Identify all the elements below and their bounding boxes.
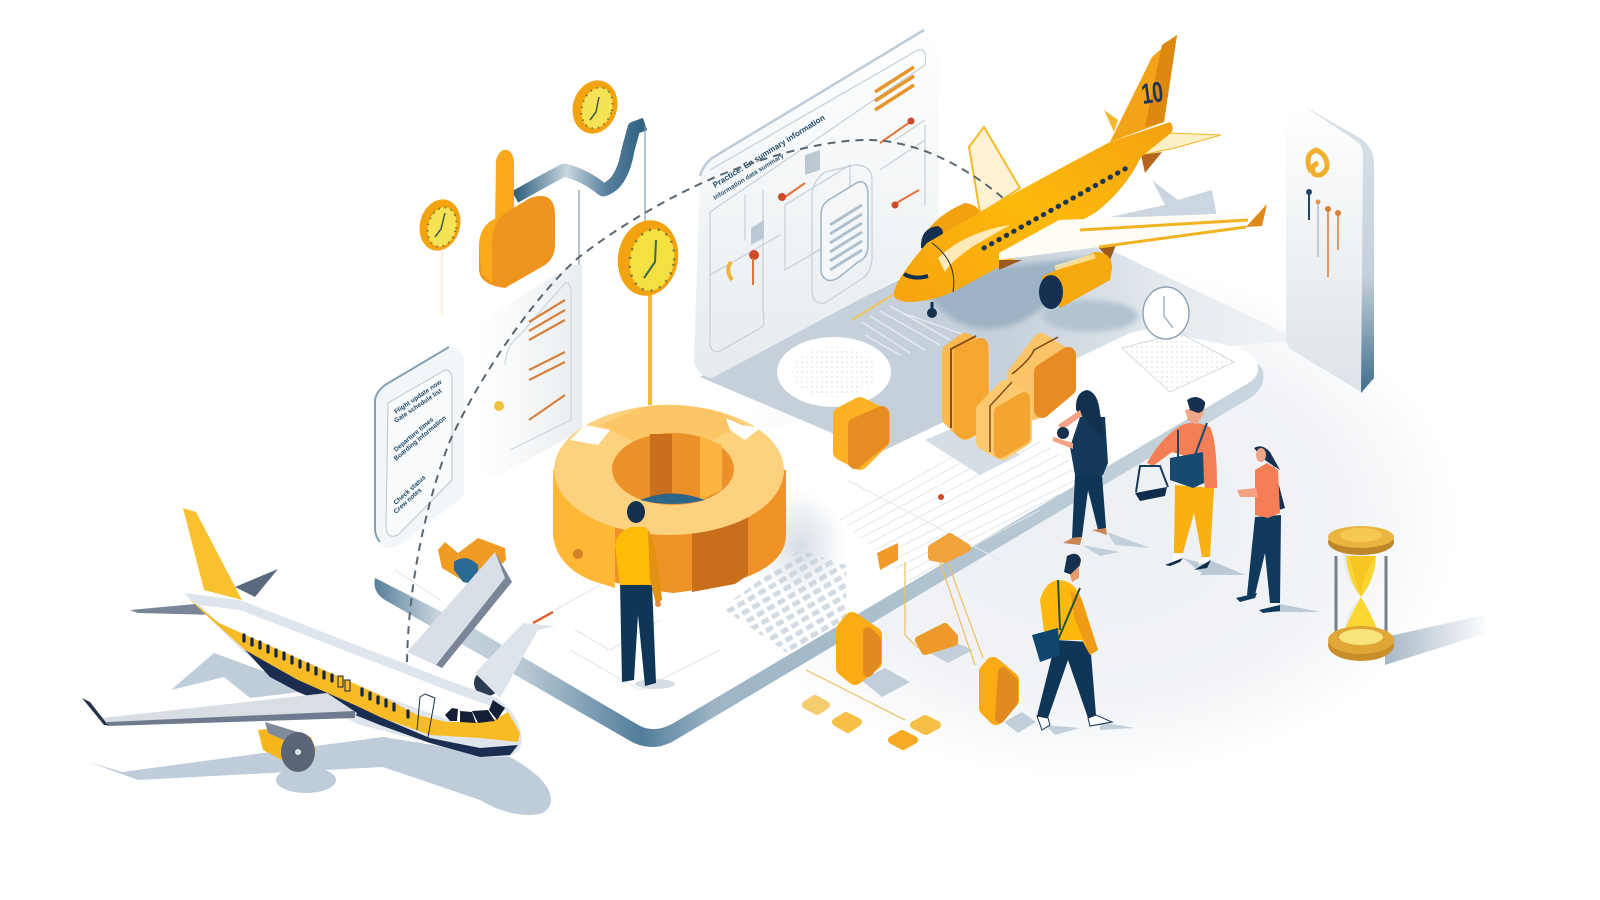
red sliders bbox=[749, 118, 919, 285]
spiral icon bbox=[1308, 150, 1327, 175]
red marker bbox=[938, 494, 944, 500]
runway ruling under nose bbox=[862, 306, 965, 355]
far engine bbox=[474, 670, 500, 696]
shadow bbox=[1183, 558, 1245, 575]
cords bbox=[806, 562, 983, 720]
tail mark: 10 bbox=[1140, 77, 1165, 111]
body highlight bbox=[938, 225, 1010, 272]
icon: clock top bbox=[566, 75, 624, 139]
person: coral vest standing bbox=[1236, 446, 1320, 613]
phone side bbox=[1302, 105, 1374, 393]
case shadow tile bbox=[925, 425, 1020, 475]
shadow: lower plane bbox=[89, 653, 551, 815]
wide case bbox=[1012, 337, 1068, 412]
tag bbox=[877, 543, 898, 570]
taxi line bbox=[852, 294, 894, 320]
note text: Boarding information bbox=[393, 415, 448, 463]
shoulder bag bbox=[1032, 628, 1060, 662]
dotted pad bbox=[792, 347, 876, 397]
tail bbox=[1110, 35, 1177, 142]
small yellow dot bbox=[494, 401, 504, 411]
engine bbox=[258, 728, 316, 770]
mid-cabin doors bbox=[338, 676, 350, 691]
case one bbox=[844, 620, 876, 677]
windows bbox=[984, 165, 1132, 248]
platform edge bbox=[374, 362, 1264, 747]
far fin bbox=[475, 623, 555, 698]
grey squares bbox=[751, 150, 820, 245]
engine shadow bbox=[1042, 300, 1138, 332]
donut structure bbox=[553, 405, 786, 593]
icon: hourglass bbox=[1328, 526, 1490, 665]
yellow stripe bbox=[188, 598, 520, 742]
icon: hanging orange tag bbox=[479, 150, 555, 288]
white band bbox=[200, 605, 520, 735]
doc icon in panel bbox=[812, 165, 872, 303]
dark belly bbox=[245, 650, 518, 757]
shadow bbox=[1045, 722, 1135, 735]
bag in hand bbox=[1136, 466, 1168, 492]
note text: Check status bbox=[393, 474, 428, 506]
stabiliser bbox=[130, 602, 218, 615]
panel: left text note bbox=[375, 347, 464, 548]
windows bbox=[244, 635, 408, 717]
far wing bbox=[969, 127, 1020, 213]
icon: ribbon connector bbox=[515, 124, 645, 265]
floor shadow bbox=[710, 262, 1460, 778]
donut notches bbox=[570, 418, 760, 445]
platform grey backdrop bbox=[700, 245, 1300, 457]
note text bbox=[393, 378, 448, 515]
donut shadow on platform bbox=[755, 490, 845, 600]
plane: white and yellow lower left bbox=[82, 508, 555, 772]
donut hole bbox=[612, 433, 734, 505]
small fin bbox=[1104, 110, 1118, 132]
tall case bbox=[950, 336, 981, 432]
pins bbox=[1308, 190, 1310, 220]
tail ground shadow bbox=[1110, 180, 1217, 217]
platform outline details bbox=[395, 570, 720, 690]
note text: Departure times bbox=[393, 416, 435, 454]
cockpit bbox=[445, 700, 505, 723]
hole floor bbox=[640, 494, 705, 504]
person: yellow shirt bbox=[573, 501, 675, 689]
note text: Gate schedule list bbox=[393, 387, 444, 425]
donut body bbox=[553, 470, 786, 593]
white circle pad bbox=[777, 337, 891, 407]
case two bbox=[987, 665, 1013, 718]
yellow ring icon bbox=[728, 262, 732, 280]
tail fin bbox=[183, 508, 242, 600]
stabiliser bbox=[1141, 133, 1221, 155]
near wing bbox=[999, 204, 1267, 260]
door bbox=[417, 694, 435, 737]
near engine bbox=[1041, 252, 1112, 308]
bags near plane bbox=[438, 538, 506, 585]
person: walking with bag bbox=[1032, 554, 1135, 735]
icon: clock left bbox=[414, 195, 466, 315]
panel text: Practice: En summary information bbox=[711, 113, 827, 190]
gear bbox=[930, 302, 934, 312]
floor shadows bbox=[861, 640, 1036, 733]
panel outlines bbox=[710, 50, 926, 352]
shadow bbox=[1275, 604, 1320, 612]
suitcases on platform bbox=[841, 336, 1068, 475]
ruled sheet bbox=[840, 425, 1080, 580]
luggage on floor bbox=[806, 537, 1036, 746]
person: coral top with bags bbox=[1135, 397, 1245, 575]
panel: large dashboard bbox=[694, 30, 939, 378]
note text: Crew notes bbox=[393, 487, 424, 515]
platform top bbox=[378, 329, 1258, 729]
shadows bbox=[1082, 532, 1150, 556]
hourglass shadow bbox=[1385, 615, 1490, 665]
person shadow bbox=[635, 679, 675, 689]
panel: left schedule bbox=[480, 265, 582, 478]
rear belly shade bbox=[1141, 152, 1162, 173]
top case bbox=[932, 537, 967, 559]
dotted rear tile bbox=[1122, 333, 1234, 392]
panel subtext: Information data summary bbox=[712, 152, 786, 202]
fuselage bbox=[894, 122, 1173, 302]
nose line bbox=[932, 243, 954, 292]
icon: white wall clock bbox=[1143, 287, 1189, 339]
platform bbox=[374, 245, 1300, 747]
dashed flight path bbox=[407, 140, 1003, 662]
front case bbox=[984, 382, 1024, 452]
donut top bbox=[554, 405, 784, 535]
wing root shade bbox=[999, 245, 1116, 270]
far engine bbox=[921, 203, 980, 255]
fuselage bbox=[184, 593, 522, 757]
orange list lines bbox=[875, 67, 914, 110]
icon: large clock on stem bbox=[612, 215, 684, 405]
orange dash bbox=[533, 612, 553, 623]
plane: yellow upper right bbox=[852, 35, 1267, 320]
coins bbox=[806, 699, 826, 711]
flat case bbox=[919, 627, 954, 651]
far wing bbox=[407, 552, 512, 668]
panel top edge bbox=[700, 30, 924, 176]
soft shadow under yellow plane bbox=[925, 255, 1105, 329]
keyboard pattern bbox=[722, 550, 846, 655]
person: woman in navy bbox=[1053, 390, 1150, 556]
near wing bbox=[82, 693, 357, 726]
panel: phone tile right bbox=[1286, 105, 1374, 393]
small case bbox=[841, 405, 882, 462]
note text: Flight update now bbox=[393, 378, 444, 416]
navy handbag bbox=[1170, 452, 1204, 488]
